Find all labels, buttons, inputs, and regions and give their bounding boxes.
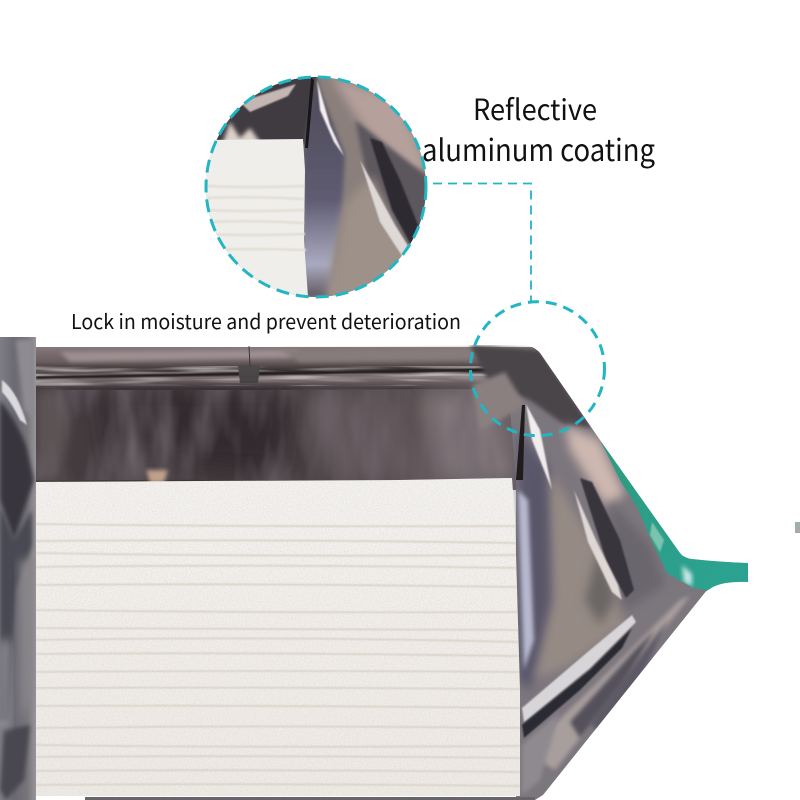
green pull tab	[600, 440, 748, 592]
band streaks	[36, 366, 506, 386]
fold highlights	[526, 404, 552, 490]
magnified circle: foil corner detail	[200, 70, 432, 300]
dark diagonal folds	[370, 138, 419, 244]
dark diagonal fold	[580, 478, 634, 598]
right gusset base	[505, 350, 710, 800]
interior reflections	[36, 388, 70, 480]
cotton tissue stack	[36, 476, 522, 798]
tissue grain	[36, 476, 522, 798]
gusset shading	[470, 345, 592, 428]
foil sealing band	[36, 347, 536, 389]
magnified tissue lines	[206, 186, 306, 250]
stray fragment at right edge	[795, 522, 800, 533]
dark foil upper left	[216, 77, 320, 146]
dashed connector line	[433, 184, 531, 301]
top circle dashed outline	[206, 77, 426, 297]
blue-grey central fold	[303, 80, 345, 297]
foil pouch	[36, 345, 710, 800]
pink upper right	[330, 75, 430, 170]
heading: Reflective: Reflective	[473, 87, 597, 129]
foil interior	[36, 389, 516, 490]
tissue layer lines	[36, 524, 520, 786]
bottom edge of pouch	[85, 797, 535, 800]
magnified tissue	[200, 139, 308, 300]
warm lower right	[325, 175, 410, 300]
notch mark on seal	[238, 366, 260, 383]
bottom circle dashed outline	[470, 302, 604, 436]
left foil strip	[0, 337, 36, 800]
caption: lock in moisture: Lock in moisture and prevent deterioration	[71, 305, 461, 335]
heading: aluminum coating: aluminum coating	[422, 126, 655, 170]
